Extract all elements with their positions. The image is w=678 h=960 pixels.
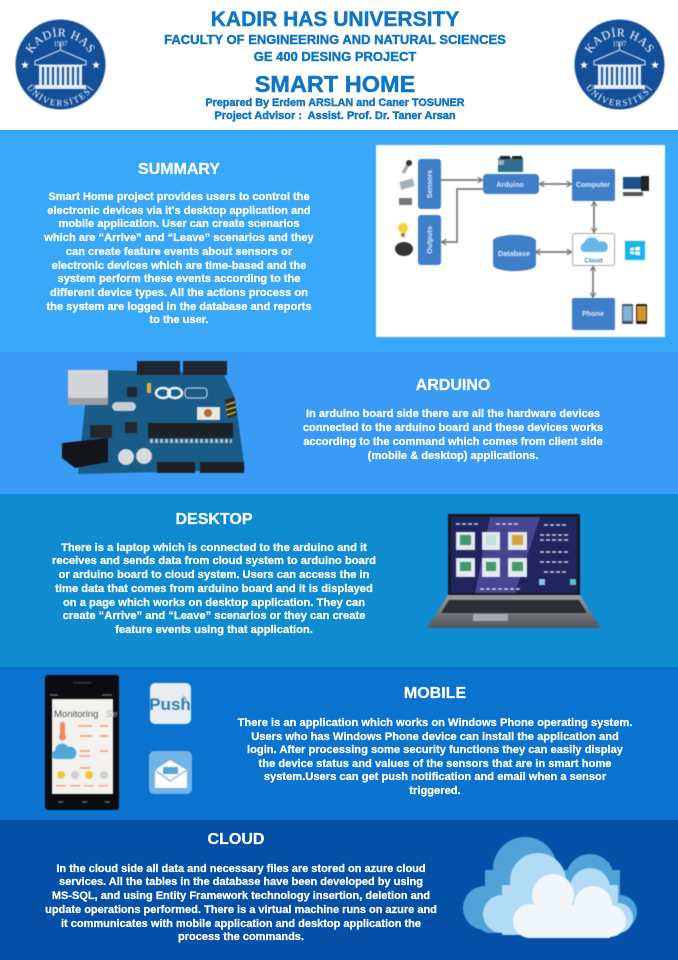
text: desktop body: There is a laptop which is connected to the arduino and it [61, 542, 367, 554]
front cloud layer [513, 874, 626, 938]
logo: right university seal: ★ [651, 60, 660, 70]
text: summary body: Smart Home project provides users to control the [48, 191, 310, 203]
panel: cloud [0, 820, 678, 960]
text: summary body: to the user. [149, 314, 209, 326]
back cloud layer [463, 837, 637, 933]
text: mobile body [238, 717, 632, 797]
text: cloud body [45, 862, 437, 943]
logo: right university seal: 1997 [612, 40, 627, 48]
cloud box: Cloud [584, 258, 603, 264]
icon: email [148, 750, 193, 795]
outputs box [418, 215, 441, 265]
text: cloud body: In the cloud side all data and necessary files are stored on azure cloud [56, 862, 426, 874]
icon: windows tile [625, 241, 645, 260]
logo: left university seal: ★ [92, 60, 101, 70]
illustration: cloud [462, 836, 638, 939]
logo: right university seal: ÜNİVERSİTESİ [586, 84, 653, 107]
computer box [572, 169, 615, 201]
database cylinder [493, 235, 536, 271]
heading: cloud: CLOUD [208, 831, 264, 848]
text: desktop body: create “Arrive” and “Leave” scenarios or they can create [63, 610, 365, 622]
illustration: laptop [426, 513, 602, 629]
illustration: arduino board [61, 360, 246, 475]
text: cloud body: MS-SQL, and using Entity Framework technology insertion, deletion and [52, 890, 430, 902]
subtitle: faculty: FACULTY OF ENGINEERING AND NATURAL SCIENCES [164, 32, 506, 47]
panel: desktop [0, 494, 678, 667]
heading: arduino: ARDUINO [416, 377, 490, 394]
text: summary body: the system are logged in the database and reports [46, 301, 312, 313]
panel: summary [0, 130, 678, 352]
sensors box [418, 159, 441, 209]
text: summary body: mobile application. User can create scenarios [58, 218, 300, 230]
header panel [0, 0, 678, 130]
subtitle: course: GE 400 DESING PROJECT [254, 49, 416, 64]
logo: left university seal: ★ [21, 60, 30, 70]
text: arduino body: In arduino board side there are all the hardware devices [306, 408, 600, 420]
text: desktop body: feature events using that application. [115, 624, 313, 636]
text: arduino body: (mobile & desktop) applications. [368, 450, 538, 462]
text: desktop body: on a page which works on desktop application. They can [63, 597, 365, 609]
text: summary body: different device types. All the actions process on [50, 287, 308, 299]
illustration: phone [44, 674, 120, 811]
text: summary body: system perform these events according to the [58, 273, 300, 285]
text: mobile body: Users who has Windows Phone device can install the application and [251, 731, 619, 743]
heading: summary: SUMMARY [138, 161, 220, 178]
text: desktop body: or arduino board to cloud system. Users can access the in [59, 569, 369, 581]
diagram: system architecture [375, 144, 666, 338]
text: summary body: which are “Arrive” and “Leave” scenarios and they [44, 232, 314, 244]
text: cloud body: update operations performed. There is a virtual machine runs on azure and [45, 904, 437, 916]
arduino box [483, 174, 539, 194]
icon: phones [622, 304, 647, 324]
database cylinder: Database [498, 249, 530, 258]
heading: mobile: MOBILE [404, 685, 466, 702]
text: summary body: electronic devices via it's desktop application and [47, 205, 311, 217]
icon: push notification: Push [150, 695, 191, 714]
icon: push notification [149, 682, 192, 725]
text: summary body: electronic devices which are time-based and the [52, 260, 306, 272]
phone box: Phone [582, 309, 604, 318]
outputs box: Outputs [425, 226, 434, 254]
panel: arduino [0, 352, 678, 494]
illustration: phone: Se [106, 709, 118, 720]
text: mobile body: login. After processing some security functions they can easily display [247, 744, 623, 756]
panel: mobile [0, 667, 678, 820]
illustration: phone: Monitoring [54, 709, 98, 720]
heading: desktop: DESKTOP [175, 511, 253, 528]
icon: arduino board [498, 156, 523, 172]
text: mobile body: the device status and values of the sensors that are in smart home [259, 758, 611, 770]
text: mobile body: triggered. [409, 785, 461, 797]
text: cloud body: process the commands. [178, 931, 304, 943]
title: smart home: SMART HOME [255, 71, 415, 97]
text: mobile body: system.Users can get push notification and email when a sensor [264, 771, 606, 783]
logo: right university seal: KADİR HAS [584, 26, 654, 54]
logo: left university seal: KADİR HAS [24, 26, 96, 54]
logo: right university seal: ★ [580, 60, 589, 70]
text: summary body: can create feature events about sensors or [66, 246, 292, 258]
text: desktop body [52, 542, 376, 636]
logo: left university seal: ÜNİVERSİTESİ [27, 84, 94, 107]
authors line: Prepared By Erdem ARSLAN and Caner TOSUNER [205, 97, 465, 109]
text: mobile body: There is an application which works on Windows Phone operating system. [238, 717, 632, 729]
sensors box: Sensors [425, 170, 434, 198]
text: summary body [44, 191, 314, 326]
text: desktop body: receives and sends data from cloud system to arduino board [52, 555, 376, 567]
text: cloud body: services. All the tables in the database have been developed by using [59, 876, 423, 888]
title: university: KADIR HAS UNIVERSITY [211, 8, 459, 31]
text: cloud body: it communicates with mobile application and desktop application the [61, 918, 421, 930]
text: arduino body: connected to the arduino board and these devices works [303, 422, 603, 434]
text: desktop body: time data that comes from arduino board and it is displayed [55, 583, 373, 595]
icon: desktop computer [623, 176, 649, 196]
icons: sensors [399, 160, 415, 205]
text: arduino body [303, 408, 603, 462]
advisor line: Project Advisor : Assist. Prof. Dr. Taner Arsan [214, 110, 456, 122]
cloud box [572, 234, 614, 266]
phone box [572, 298, 615, 330]
arduino box: Arduino [496, 180, 524, 189]
logo: left university seal: 1997 [54, 40, 68, 48]
computer box: Computer [576, 180, 610, 189]
text: arduino body: according to the command which comes from client side [303, 436, 603, 448]
middle cloud layer [483, 853, 633, 935]
logo: left university seal [14, 18, 106, 110]
logo: right university seal [574, 18, 666, 110]
icons: outputs [395, 223, 413, 256]
arrows [441, 180, 594, 297]
